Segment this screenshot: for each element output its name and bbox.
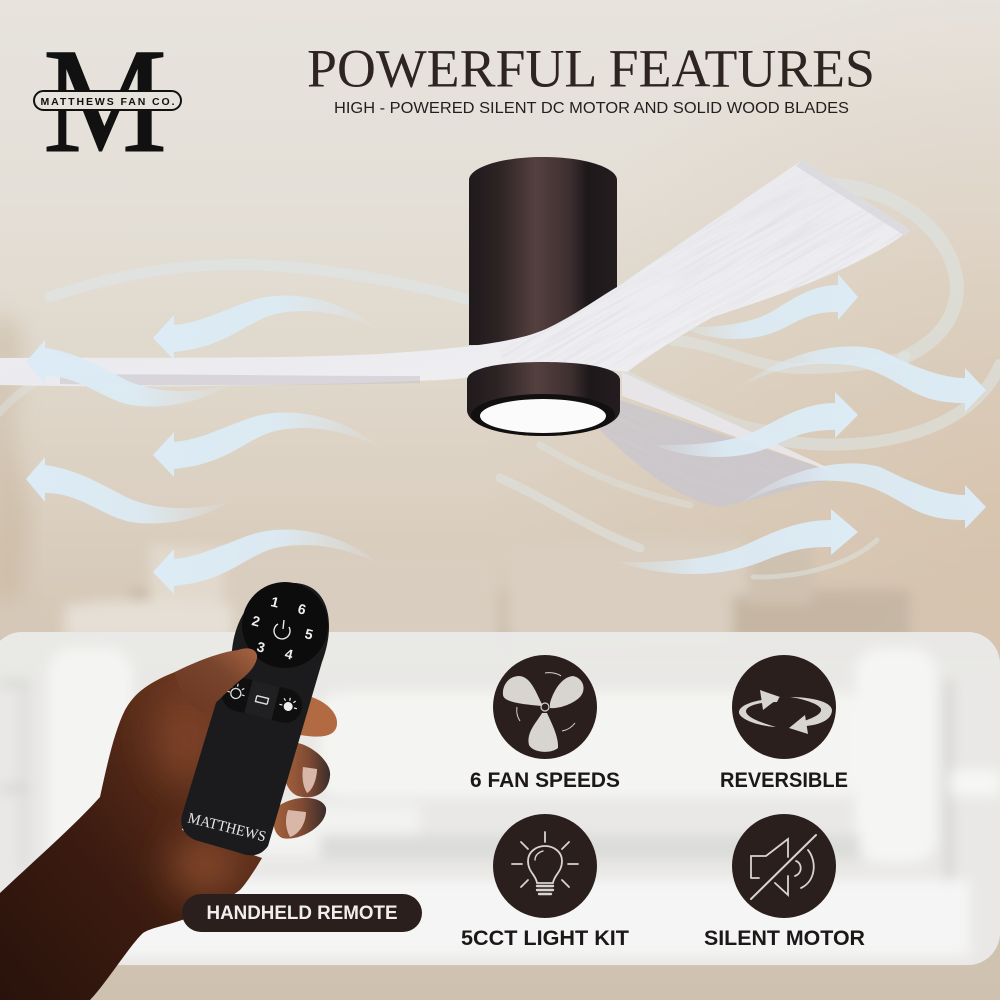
- remote keypad disc: [242, 582, 328, 668]
- icon: light kit: [493, 814, 597, 918]
- label: reversible: REVERSIBLE: [720, 768, 848, 792]
- fan: light ring: [467, 362, 620, 436]
- remote keypad disc: 1: [269, 593, 281, 611]
- logo: MATTHEWS FAN CO.: [40, 96, 175, 108]
- arm and palm: [0, 670, 262, 1000]
- remote label pill: HANDHELD REMOTE: [206, 903, 398, 924]
- thumb: [175, 648, 257, 713]
- fan: lower right blade: [600, 372, 826, 507]
- remote function buttons: [218, 674, 306, 726]
- title: POWERFUL FEATURES: [307, 38, 875, 98]
- label: silent motor: SILENT MOTOR: [704, 926, 865, 950]
- fan: long blades: [0, 160, 910, 386]
- remote brand text: MATTHEWS: [186, 811, 268, 845]
- remote keypad disc: 6: [296, 600, 308, 618]
- remote label pill: [182, 894, 422, 932]
- remote control body: [181, 583, 329, 855]
- hand holding remote: [0, 582, 340, 1000]
- remote keypad disc: 3: [255, 638, 267, 656]
- icon: silent motor: [732, 814, 836, 918]
- label: light kit: 5CCT LIGHT KIT: [461, 926, 629, 950]
- subtitle: HIGH - POWERED SILENT DC MOTOR AND SOLID WOOD BLADES: [334, 100, 849, 117]
- fan: motor housing: [469, 157, 617, 345]
- logo: M: [43, 18, 167, 184]
- air arrows, left pointing: [26, 296, 380, 594]
- remote keypad disc: 2: [250, 612, 262, 630]
- air arrows, right pointing upper row: [740, 346, 986, 529]
- air arrows, right pointing lower row: [618, 274, 858, 574]
- icon: reversible: [732, 655, 836, 759]
- remote keypad disc: 5: [303, 625, 315, 643]
- remote keypad disc: 4: [283, 645, 295, 663]
- air swirl bands: [0, 185, 1000, 577]
- index and lower fingers: [274, 695, 337, 839]
- label: 6 fan speeds: 6 FAN SPEEDS: [470, 768, 620, 792]
- icon: fan speeds: [493, 655, 597, 759]
- feature panel: [0, 632, 1000, 965]
